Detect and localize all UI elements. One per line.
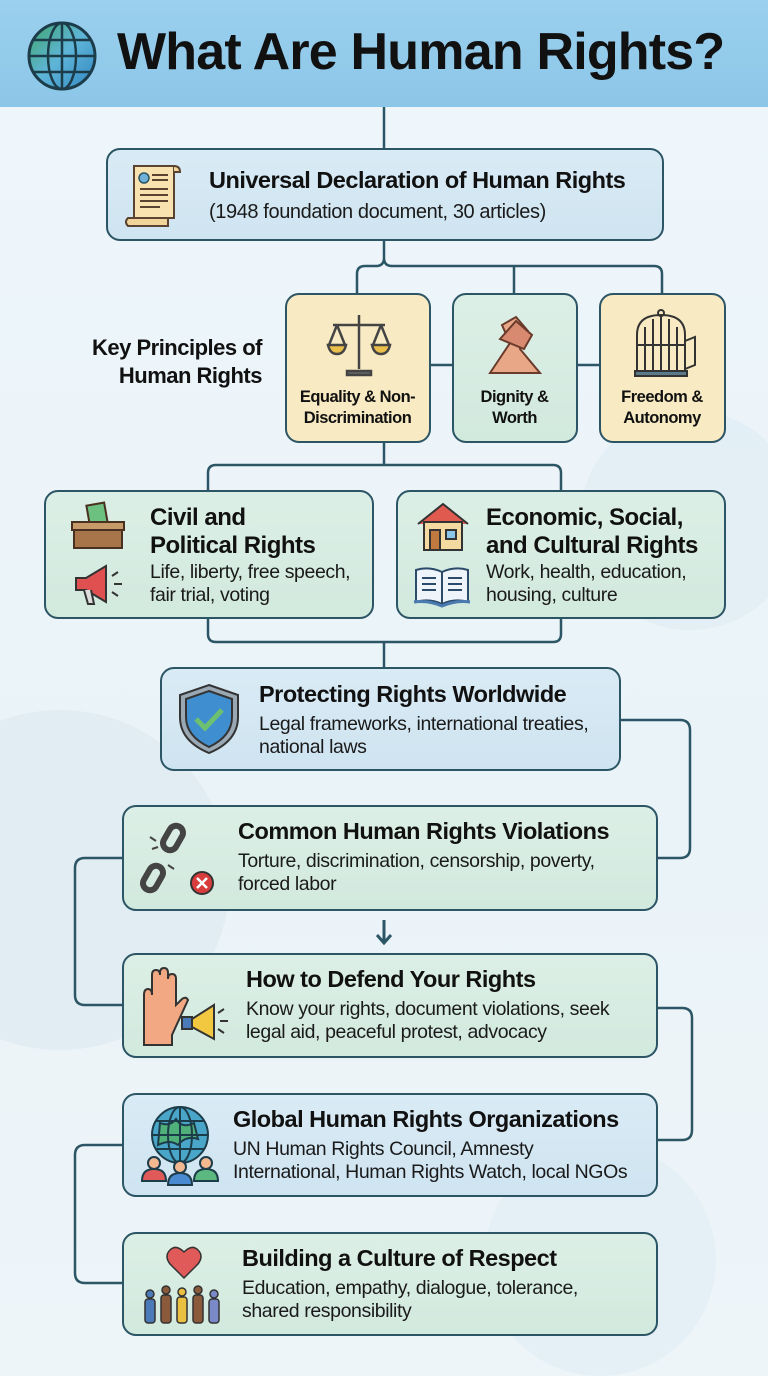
icon: hand and megaphone: [143, 967, 228, 1046]
heading: Political Rights: [150, 532, 315, 559]
icon: scales: [326, 315, 392, 376]
heading: Civil and: [150, 504, 246, 531]
text: [246, 998, 610, 1043]
text: International, Human Rights Watch, local NGOs: [233, 1161, 627, 1183]
text: fair trial, voting: [150, 584, 270, 606]
label: [481, 388, 548, 427]
heading: key principles: [92, 335, 262, 388]
heading: Protecting Rights Worldwide: [259, 681, 566, 707]
label: Freedom &: [621, 388, 703, 406]
heading: Common Human Rights Violations: [238, 818, 609, 844]
icon: heart and people: [144, 1246, 220, 1324]
heading: Universal Declaration of Human Rights: [209, 167, 625, 193]
icon: handshake: [488, 316, 542, 374]
subtitle: (1948 foundation document, 30 articles): [209, 201, 546, 223]
icon: broken chain: [140, 822, 214, 895]
icon: shield: [179, 684, 239, 754]
text: shared responsibility: [242, 1300, 411, 1322]
text: [150, 561, 350, 606]
header bar: [0, 0, 768, 107]
heading: [486, 504, 698, 559]
panel: dignity: [452, 293, 578, 443]
panel: violations: [122, 805, 658, 911]
panel: culture of respect: [122, 1232, 658, 1336]
heading: key principles: Human Rights: [119, 363, 262, 388]
icon: house: [417, 502, 469, 551]
heading: Economic, Social,: [486, 504, 683, 531]
panel: global organizations: [122, 1093, 658, 1197]
panel: civil and political: [44, 490, 374, 619]
icon: globe with people: [141, 1106, 219, 1186]
text: national laws: [259, 736, 367, 758]
icon: scroll: [124, 165, 181, 227]
title: What Are Human Rights?: [117, 23, 724, 81]
panel: economic social cultural: [396, 490, 726, 619]
text: UN Human Rights Council, Amnesty: [233, 1138, 533, 1160]
text: forced labor: [238, 873, 336, 895]
panel: UDHR: [106, 148, 664, 241]
heading: key principles: Key Principles of: [92, 335, 262, 360]
text: Life, liberty, free speech,: [150, 561, 350, 583]
icon: open cage: [634, 309, 696, 377]
label: [621, 388, 703, 427]
label: Worth: [492, 409, 537, 427]
icon: megaphone: [75, 564, 122, 605]
panel: equality: [285, 293, 431, 443]
label: Equality & Non-Discrimination: [300, 388, 415, 427]
text: [233, 1138, 627, 1183]
text: Work, health, education,: [486, 561, 686, 583]
heading: [150, 504, 315, 559]
panel: defend: [122, 953, 658, 1058]
icon: globe: [28, 22, 96, 90]
panel: freedom: [599, 293, 726, 443]
arrow: down: [376, 920, 392, 946]
heading: How to Defend Your Rights: [246, 966, 536, 992]
icon: book: [414, 567, 470, 608]
label: Dignity &: [481, 388, 548, 406]
heading: Global Human Rights Organizations: [233, 1106, 619, 1132]
text: Education, empathy, dialogue, tolerance,: [242, 1277, 578, 1299]
text: Legal frameworks, international treaties,: [259, 713, 588, 735]
text: legal aid, peaceful protest, advocacy: [246, 1021, 547, 1043]
text: [238, 850, 595, 895]
label: Autonomy: [623, 409, 701, 427]
text: [486, 561, 686, 606]
heading: Building a Culture of Respect: [242, 1245, 557, 1271]
heading: and Cultural Rights: [486, 532, 698, 559]
icon: ballot box: [71, 501, 125, 549]
text: Torture, discrimination, censorship, poverty,: [238, 850, 595, 872]
text: housing, culture: [486, 584, 617, 606]
panel: protecting rights: [160, 667, 621, 771]
text: Know your rights, document violations, seek: [246, 998, 609, 1020]
text: [242, 1277, 578, 1322]
text: [259, 713, 588, 758]
